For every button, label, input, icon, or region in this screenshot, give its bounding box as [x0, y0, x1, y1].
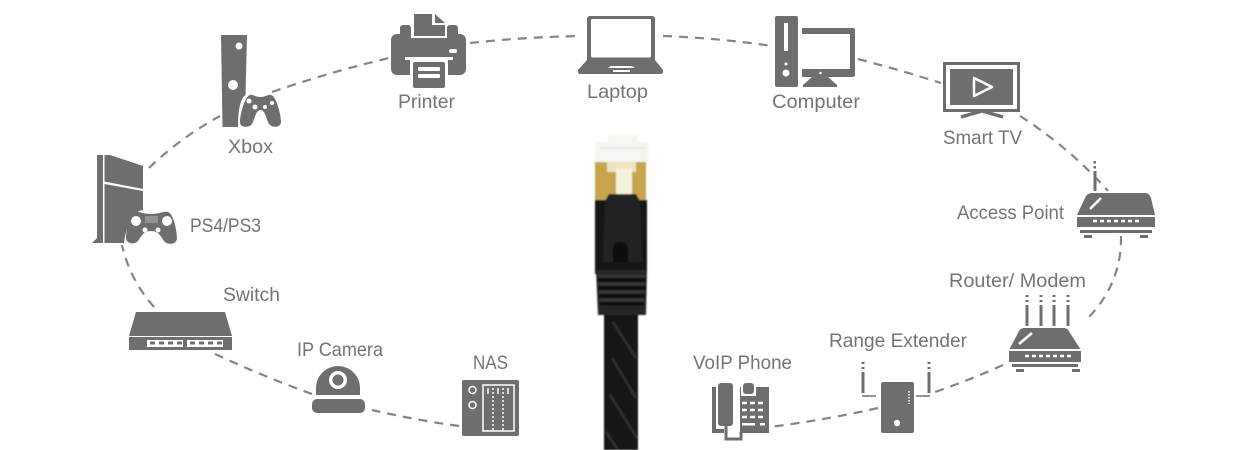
icon: PlayStation console and controller: [92, 155, 177, 244]
label: NAS: NAS: [473, 352, 508, 374]
label: Range Extender: Range Extender: [829, 330, 967, 352]
device: Laptop: [578, 16, 663, 103]
icon: router with four antennas: [1009, 295, 1081, 372]
icon: network switch: [129, 312, 232, 350]
label: Printer: Printer: [398, 91, 455, 113]
label: Xbox: Xbox: [228, 136, 273, 158]
icon: range extender: [862, 362, 930, 433]
icon: access point router: [1077, 161, 1155, 238]
dashed connections ring: [122, 36, 1121, 427]
label: Computer: Computer: [772, 91, 861, 113]
label: Access Point: Access Point: [957, 202, 1065, 224]
device: Printer: [391, 12, 466, 113]
icon: Xbox console and controller: [221, 35, 281, 127]
device: NAS: [462, 352, 519, 436]
label: Smart TV: Smart TV: [943, 127, 1022, 149]
device: IP Camera: [297, 339, 383, 413]
device: Switch: [129, 284, 280, 350]
label: Router/ Modem: Router/ Modem: [949, 270, 1086, 292]
Ethernet cable with RJ45 plug: [595, 135, 648, 450]
device: VoIP Phone: [693, 352, 792, 439]
icon: printer: [391, 12, 466, 90]
icon: desktop computer: [775, 16, 855, 87]
device: Range Extender: [829, 330, 967, 433]
cable jacket: [604, 312, 638, 450]
label: VoIP Phone: VoIP Phone: [693, 352, 792, 374]
plug clear contacts: [595, 135, 648, 162]
device: Smart TV: [943, 62, 1022, 149]
device: PS4/PS3: [92, 155, 261, 244]
icon: desk phone: [712, 383, 769, 439]
device: Access Point: [957, 161, 1155, 238]
device: Router/Modem: [949, 270, 1086, 372]
device: Computer: [772, 16, 861, 113]
label: Laptop: Laptop: [587, 81, 648, 103]
label: Switch: Switch: [223, 284, 280, 306]
plug gold shield: [595, 162, 646, 202]
icon: laptop: [578, 16, 663, 74]
icon: dome camera: [312, 366, 365, 413]
icon: NAS enclosure: [462, 380, 519, 436]
label: IP Camera: IP Camera: [297, 339, 383, 361]
device: Xbox: [221, 35, 281, 158]
label: PS4/PS3: PS4/PS3: [190, 215, 261, 237]
icon: smart TV: [943, 62, 1020, 117]
boot: [595, 194, 647, 315]
